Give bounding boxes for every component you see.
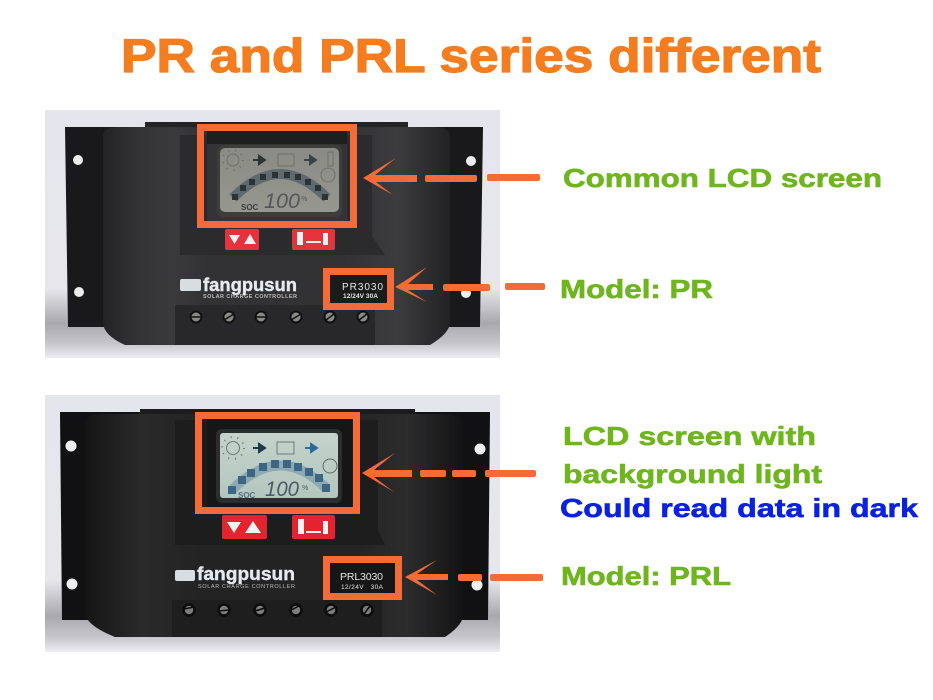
mode buttons — [222, 515, 335, 539]
backlit LCD screen: % — [302, 485, 308, 492]
model plate: PRL3030 — [340, 571, 383, 583]
photo backdrop — [45, 110, 500, 358]
brand logo: fangpusun — [203, 275, 297, 295]
label: common LCD screen: Common LCD screen — [563, 163, 882, 193]
panel: PR controller photo — [45, 110, 500, 358]
LCD screen: 100 — [264, 190, 300, 213]
model plate: 12/24V 30A — [341, 584, 384, 591]
arrow: to PRL model plate — [405, 560, 543, 595]
photo backdrop — [45, 395, 500, 652]
brand logo — [175, 564, 295, 590]
label: model PR: Model: PR — [560, 274, 713, 304]
label: model PRL: Model: PRL — [561, 561, 731, 591]
mode buttons — [225, 229, 335, 250]
backlit LCD screen — [207, 418, 352, 511]
model plate — [326, 272, 390, 306]
label: LCD with background light: LCD screen with — [563, 421, 816, 451]
model plate: 12/24V 30A — [343, 293, 378, 300]
terminal screws — [184, 604, 372, 616]
model plate: PR3030 — [342, 282, 383, 293]
brand logo — [180, 275, 297, 300]
backlit LCD screen: 100 — [265, 478, 299, 501]
backlit LCD screen: SOC — [238, 491, 256, 500]
label: LCD with background light — [563, 421, 822, 489]
brand logo: SOLAR CHARGE CONTROLLER — [198, 584, 295, 590]
LCD highlight box — [200, 128, 354, 224]
model plate — [326, 560, 398, 596]
panel: PRL controller photo — [45, 395, 500, 652]
LCD screen: SOC — [241, 203, 259, 212]
LCD screen: % — [301, 196, 307, 203]
LCD highlight box — [198, 416, 356, 510]
controller body — [85, 409, 463, 637]
title: PR and PRL series different — [121, 29, 821, 82]
LCD screen — [207, 130, 347, 225]
brand logo: fangpusun — [197, 564, 295, 584]
mounting bracket — [65, 127, 483, 327]
arrow: to PR model plate — [395, 267, 545, 302]
arrow: to common LCD screen — [363, 158, 540, 195]
mounting bracket — [60, 412, 490, 620]
label: read data in dark: Could read data in dark — [560, 493, 919, 523]
brand logo: SOLAR CHARGE CONTROLLER — [203, 294, 297, 300]
terminal screws — [190, 312, 368, 322]
arrow: to backlit LCD screen — [362, 453, 536, 492]
controller body — [103, 122, 450, 345]
label: LCD with background light: background light — [563, 459, 822, 489]
